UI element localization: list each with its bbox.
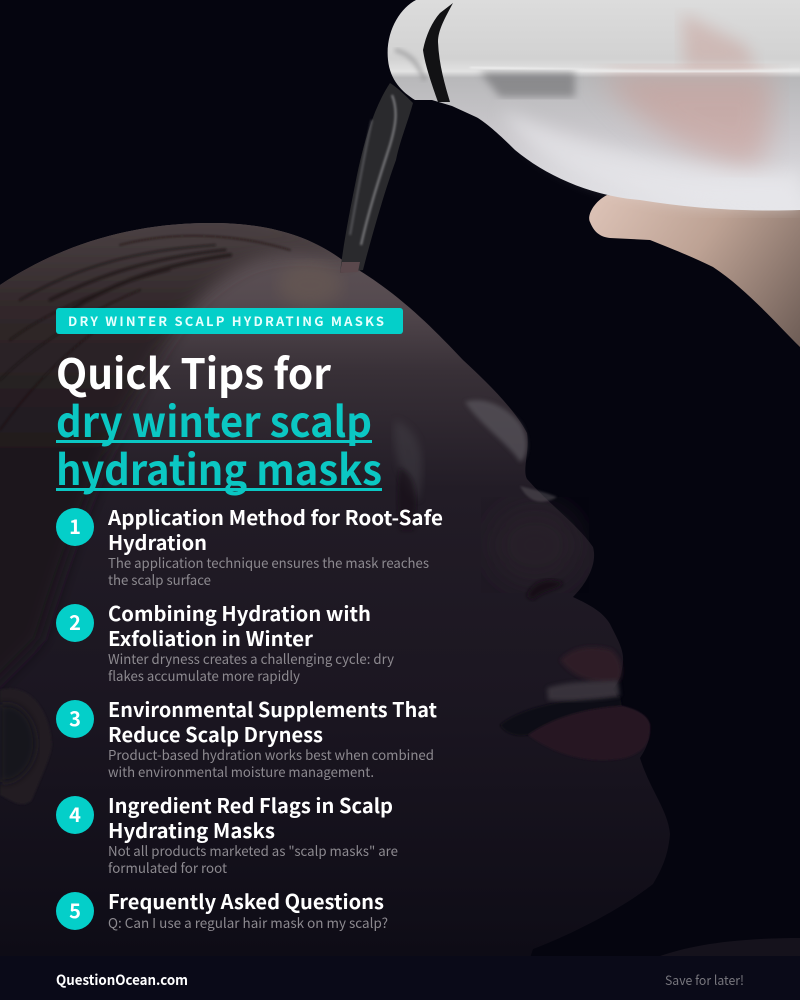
eye socket: [397, 468, 416, 530]
number badge 4: 4: [69, 799, 81, 828]
number badge 2: 2: [69, 607, 81, 636]
shoulder: [660, 938, 800, 956]
eyelashes: [520, 486, 557, 502]
photo: water stream: [340, 83, 413, 273]
condensation: [520, 44, 660, 52]
footer bar: [0, 956, 800, 1000]
hair: [0, 223, 338, 622]
teeth: [547, 680, 620, 701]
shadow under water line: [480, 72, 575, 97]
bottle lower highlight: [500, 110, 800, 208]
tip 4: Hydrating Masks: [108, 815, 275, 844]
tip 3: Environmental Supplements That: [108, 694, 438, 723]
number badge 5: [56, 892, 94, 930]
tag badge: [56, 308, 403, 334]
tip 1: The application technique ensures the mask reaches: [108, 552, 429, 572]
number badge 1: 1: [69, 511, 81, 540]
tag badge: DRY WINTER SCALP HYDRATING MASKS: [68, 311, 384, 330]
tip 2: Winter dryness creates a challenging cycle: dry: [108, 648, 394, 668]
tip 3: with environmental moisture management.: [108, 761, 374, 781]
tip 1: Application Method for Root-Safe: [107, 502, 443, 531]
title: hydrating masks: [56, 437, 382, 498]
lower lip: [528, 706, 650, 760]
photo: head in profile: [0, 210, 800, 958]
tip 2: Exfoliation in Winter: [108, 623, 313, 652]
tip 1: the scalp surface: [108, 569, 211, 589]
tip 4: formulated for root: [108, 857, 227, 877]
title: Quick Tips for: [56, 341, 332, 402]
brow and eye water: [465, 400, 527, 462]
tip 2: Combining Hydration with: [108, 598, 371, 627]
tip 5: Frequently Asked Questions: [108, 886, 384, 915]
number badge 2: [56, 604, 94, 642]
tip 3: [56, 694, 438, 781]
bottle contents tint: [600, 73, 772, 168]
water line: [470, 67, 800, 72]
nostril: [527, 580, 563, 600]
title: [56, 341, 382, 498]
mouth: [500, 696, 622, 736]
photo: hand holding bottle: [388, 0, 800, 347]
tip 2: flakes accumulate more rapidly: [108, 665, 300, 685]
save note: Save for later!: [665, 970, 744, 989]
tip 1: Hydration: [108, 527, 207, 556]
tip 4: [56, 790, 398, 877]
nose highlight: [490, 505, 580, 585]
hair streaks: [0, 236, 290, 430]
number badge 3: [56, 700, 94, 738]
tip 2: [56, 598, 394, 685]
number badge 3: 3: [69, 703, 81, 732]
ear: [0, 688, 52, 804]
number badge 4: [56, 796, 94, 834]
tip 4: Ingredient Red Flags in Scalp: [108, 790, 393, 819]
tip 4: Not all products marketed as "scalp masks" are: [108, 840, 398, 860]
forehead stain: [278, 263, 342, 307]
tip 5: [56, 886, 388, 932]
number badge 1: [56, 508, 94, 546]
site name: QuestionOcean.com: [56, 970, 188, 990]
black ring: [423, 3, 453, 102]
tip 5: Q: Can I use a regular hair mask on my scalp?: [108, 912, 388, 932]
tip 3: Product-based hydration works best when combined: [108, 744, 434, 764]
title: dry winter scalp: [56, 389, 372, 450]
upper lip: [560, 647, 622, 682]
number badge 5: 5: [69, 895, 81, 924]
tip 3: Reduce Scalp Dryness: [108, 719, 323, 748]
tip 1: [56, 502, 443, 589]
